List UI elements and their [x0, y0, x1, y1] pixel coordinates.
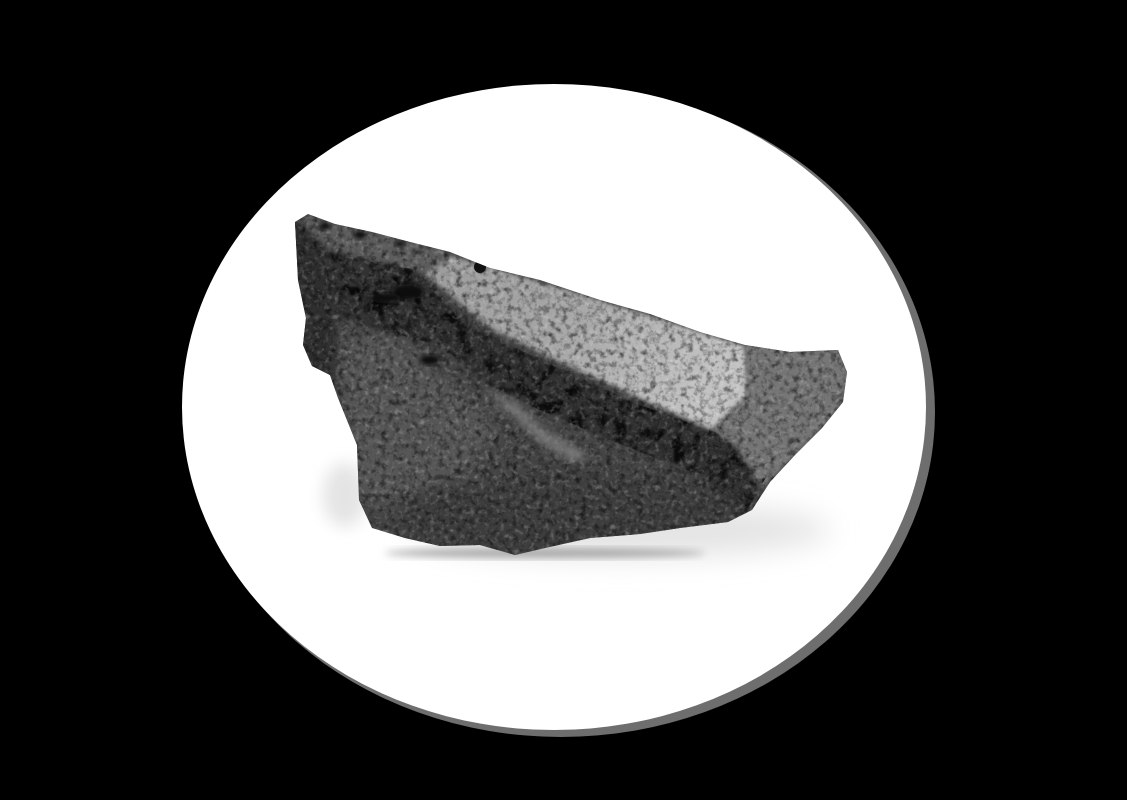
- left dark face: [295, 220, 339, 396]
- rock base: [285, 205, 855, 565]
- rock: [285, 205, 855, 565]
- right end face: [712, 345, 850, 490]
- light top face: [425, 256, 748, 430]
- ellipse shadow: [187, 87, 935, 737]
- pale ridge: [485, 390, 590, 463]
- top left pitted face: [298, 216, 452, 275]
- illustration: rock on white ellipse: [182, 84, 935, 737]
- upper rough band: [325, 250, 770, 515]
- lower front shade: [394, 483, 744, 555]
- surface grain: [285, 205, 855, 565]
- pits: [320, 222, 486, 365]
- cast shadow: [323, 463, 830, 558]
- front lighter area: [338, 335, 500, 500]
- rough dark blotches: [327, 252, 767, 514]
- white ellipse: [182, 84, 926, 730]
